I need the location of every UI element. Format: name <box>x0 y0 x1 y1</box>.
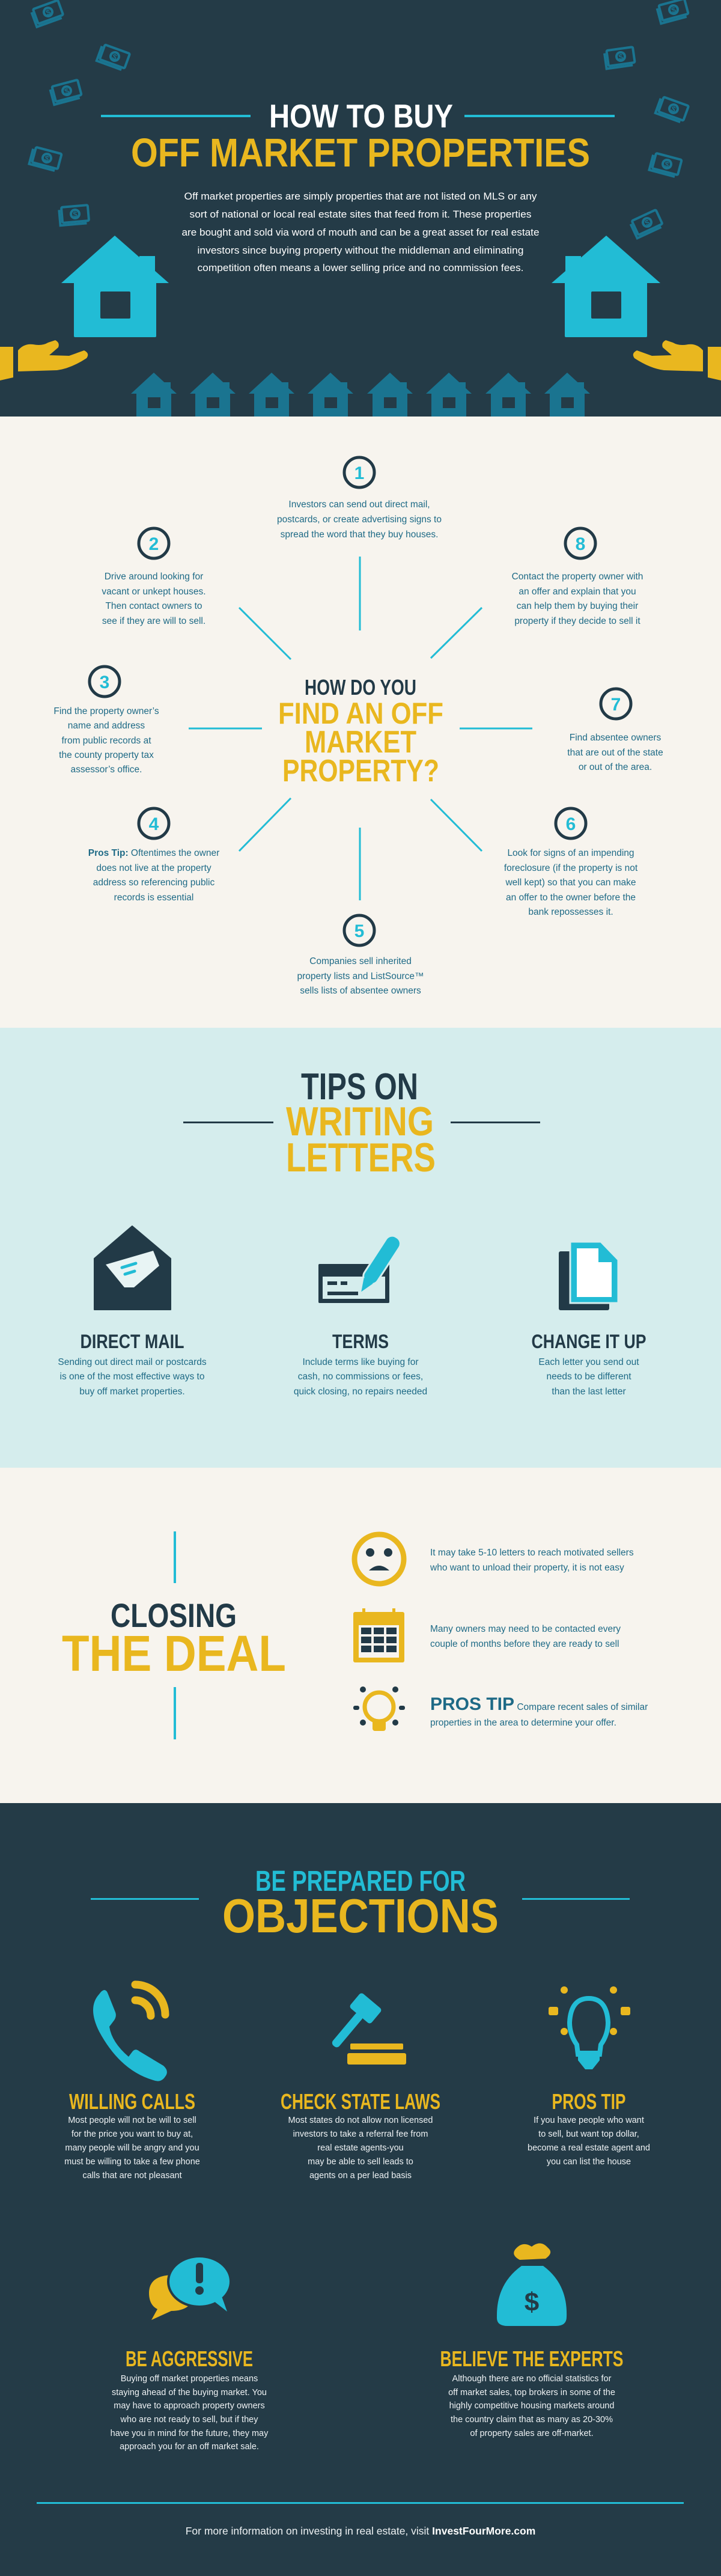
step texts: name and address <box>68 721 145 731</box>
icon: right house <box>552 236 660 337</box>
step texts: Find absentee owners <box>570 733 662 743</box>
step texts: Pros Tip: Oftentimes the owner <box>88 848 219 858</box>
step texts: Then contact owners to <box>105 601 202 611</box>
heading: tips on writing letters: LETTERS <box>286 1135 436 1180</box>
step texts: see if they are will to sell. <box>102 616 205 626</box>
panel: how do you find an off market property: 4 <box>149 814 159 834</box>
step texts: well kept) so that you can make <box>505 877 636 888</box>
objections row 2: Buying off market properties means <box>121 2374 258 2384</box>
panel: how do you find an off market property: 7 <box>611 695 621 715</box>
step texts: bank repossesses it. <box>528 907 613 917</box>
tips: three columns: Sending out direct mail or postcards <box>58 1357 207 1367</box>
closing texts <box>430 1548 648 1728</box>
section backgrounds <box>0 0 721 417</box>
objections row 1: must be willing to take a few phone <box>64 2157 200 2167</box>
row of small houses <box>131 373 590 417</box>
objections row 1: may be able to sell leads to <box>308 2157 413 2167</box>
icon: check and pen <box>318 1233 403 1303</box>
heading: be prepared for objections: BE PREPARED FOR <box>255 1866 466 1897</box>
icons: money bills: $ <box>64 86 70 96</box>
step texts: spread the word that they buy houses. <box>281 530 438 540</box>
tips: three columns: than the last letter <box>552 1387 626 1397</box>
icon: left hand <box>0 340 88 380</box>
objections row 1: many people will be angry and you <box>65 2143 199 2153</box>
heading: be prepared for objections: OBJECTIONS <box>222 1889 499 1943</box>
objections row 1: you can list the house <box>547 2157 631 2167</box>
icon: phone <box>93 1985 167 2081</box>
objections row 1: PROS TIP <box>552 2089 626 2114</box>
step texts: address so referencing public <box>93 877 214 888</box>
objections row 2: of property sales are off-market. <box>470 2429 594 2438</box>
tips: three columns: DIRECT MAIL <box>81 1331 184 1352</box>
step texts: from public records at <box>61 736 151 746</box>
step texts: Find the property owner’s <box>53 706 159 716</box>
objections row 2: who are not ready to sell, but if they <box>120 2415 258 2425</box>
icon: money bag: $ <box>525 2288 539 2317</box>
step texts: property if they decide to sell it <box>514 616 640 626</box>
number circles <box>90 457 631 945</box>
icons: money bills: $ <box>643 218 651 228</box>
heading: tips on writing letters: TIPS ON <box>301 1066 418 1108</box>
tips: three columns: buy off market properties. <box>79 1387 185 1397</box>
icons: money bills <box>29 0 689 238</box>
icons: money bills: $ <box>663 159 671 169</box>
heading: closing the deal <box>62 1531 286 1739</box>
objections row 1: If you have people who want <box>534 2116 644 2125</box>
panel: how do you find an off market property: 6 <box>566 814 576 834</box>
step texts: an offer to the owner before the <box>506 893 636 903</box>
objections row 1: calls that are not pleasant <box>82 2171 182 2181</box>
step texts: can help them by buying their <box>517 601 638 611</box>
icon: light bulb <box>353 1686 405 1731</box>
icon: calendar <box>353 1608 404 1662</box>
objections row 1: CHECK STATE LAWS <box>281 2089 440 2114</box>
step texts: records is essential <box>114 893 193 903</box>
objections row 2: highly competitive housing markets around <box>449 2401 614 2411</box>
center heading <box>278 675 443 789</box>
objections row 2: staying ahead of the buying market. You <box>112 2388 267 2397</box>
objections row 1 <box>64 2089 650 2181</box>
tips: three columns: quick closing, no repairs needed <box>294 1387 427 1397</box>
closing texts: properties in the area to determine your offer. <box>430 1718 616 1728</box>
tips: three columns: CHANGE IT UP <box>531 1331 646 1352</box>
step texts: Companies sell inherited <box>309 956 412 966</box>
step texts: Investors can send out direct mail, <box>288 499 430 510</box>
heading: closing the deal: CLOSING <box>111 1596 237 1634</box>
objections row 1: for the price you want to buy at, <box>71 2129 193 2139</box>
tips: three columns: cash, no commissions or fees, <box>298 1372 423 1382</box>
tips: three columns: is one of the most effective ways to <box>60 1372 204 1382</box>
intro paragraph <box>181 191 540 273</box>
heading: closing the deal: THE DEAL <box>62 1625 286 1682</box>
objections row 1: agents on a per lead basis <box>309 2171 412 2181</box>
spokes <box>189 557 532 900</box>
heading: be prepared for objections <box>91 1866 630 1943</box>
step texts: Look for signs of an impending <box>507 848 634 858</box>
panel: how do you find an off market property: 8 <box>576 534 585 554</box>
tips: three columns: Each letter you send out <box>538 1357 639 1367</box>
objections row 2: BELIEVE THE EXPERTS <box>440 2346 624 2371</box>
step texts: vacant or unkept houses. <box>102 587 206 597</box>
panel: how do you find an off market property <box>53 457 663 996</box>
objections row 1: Most people will not be will to sell <box>68 2116 196 2125</box>
tips: three columns <box>58 1331 646 1397</box>
icons: money bills: $ <box>44 7 52 17</box>
objections row 2: approach you for an off market sale. <box>120 2442 259 2452</box>
panel: how do you find an off market property: 2 <box>149 534 159 554</box>
icons: money bills: $ <box>671 5 677 15</box>
closing texts: PROS TIP Compare recent sales of similar <box>430 1694 648 1714</box>
closing texts: Many owners may need to be contacted every <box>430 1624 621 1634</box>
step texts: postcards, or create advertising signs to <box>277 514 442 525</box>
objections row 1: become a real estate agent and <box>528 2143 650 2153</box>
icons: money bills: $ <box>618 52 624 61</box>
step texts: Contact the property owner with <box>512 572 643 582</box>
icon: sad face <box>354 1534 404 1584</box>
step texts: Drive around looking for <box>105 572 203 582</box>
intro paragraph: sort of national or local real estate sites that feed from it. These properties <box>190 209 531 220</box>
step texts: does not live at the property <box>96 863 211 873</box>
objections row 2 <box>111 2346 624 2452</box>
icon: gavel <box>323 1992 406 2065</box>
icons: money bills: $ <box>73 210 78 219</box>
objections row 2: have you in mind for the future, they may <box>111 2429 269 2438</box>
intro paragraph: are bought and sold via word of mouth and can be a great asset for real estate <box>181 227 540 238</box>
panel: how do you find an off market property: 5 <box>354 921 364 941</box>
intro paragraph: competition often means a lower selling price and no commission fees. <box>197 262 524 273</box>
objections row 1: WILLING CALLS <box>69 2089 195 2114</box>
title: HOW TO BUY <box>269 97 453 135</box>
objections row 2: off market sales, top brokers in some of the <box>448 2388 615 2397</box>
intro paragraph: investors since buying property without the middleman and eliminating <box>197 245 524 256</box>
objections row 1: Most states do not allow non licensed <box>288 2116 433 2125</box>
heading: tips on writing letters <box>183 1066 540 1180</box>
step texts <box>53 499 663 996</box>
objections row 2: BE AGGRESSIVE <box>126 2346 253 2371</box>
step texts: sells lists of absentee owners <box>300 986 421 996</box>
objections row 1: real estate agents-you <box>317 2143 404 2153</box>
step texts: foreclosure (if the property is not <box>504 863 638 873</box>
center heading: HOW DO YOU <box>305 675 416 700</box>
center heading: FIND AN OFF <box>278 697 443 730</box>
closing texts: It may take 5-10 letters to reach motivated sellers <box>430 1548 634 1558</box>
step texts: an offer and explain that you <box>519 587 636 597</box>
icon: envelope <box>94 1226 171 1310</box>
icon: left house <box>61 236 169 337</box>
title <box>101 97 615 175</box>
tips: three columns: Include terms like buying for <box>303 1357 418 1367</box>
step texts: assessor’s office. <box>71 765 142 775</box>
panel: how do you find an off market property: 3 <box>100 673 109 692</box>
objections row 2: may have to approach property owners <box>114 2401 265 2411</box>
objections row 1: investors to take a referral fee from <box>293 2129 428 2139</box>
objections row 2: the country claim that as many as 20-30% <box>451 2415 613 2425</box>
footer <box>37 2502 684 2537</box>
icon: documents <box>559 1242 618 1310</box>
center heading: PROPERTY? <box>282 754 439 789</box>
icon: speech bubbles <box>149 2256 231 2320</box>
icon: money bag <box>497 2243 567 2326</box>
heading: tips on writing letters: WRITING <box>286 1099 434 1144</box>
step texts: property lists and ListSource™ <box>297 971 424 981</box>
tips: three columns: TERMS <box>332 1331 389 1352</box>
panel: how do you find an off market property: 1 <box>354 463 364 483</box>
objections row 2: Although there are no official statistics for <box>452 2374 612 2384</box>
step texts: that are out of the state <box>567 748 663 758</box>
icons: money bills: $ <box>111 52 119 62</box>
center heading: MARKET <box>305 725 416 760</box>
objections row 1: to sell, but want top dollar, <box>538 2129 639 2139</box>
closing texts: who want to unload their property, it is not easy <box>430 1563 624 1573</box>
intro paragraph: Off market properties are simply properties that are not listed on MLS or any <box>184 191 537 202</box>
icon: light bulb cyan <box>549 1986 630 2069</box>
icon: right hand <box>633 340 721 380</box>
footer: For more information on investing in real estate, visit InvestFourMore.com <box>186 2525 535 2537</box>
tips: three columns: needs to be different <box>546 1372 631 1382</box>
closing texts: couple of months before they are ready to sell <box>430 1639 619 1649</box>
icons: money bills: $ <box>670 104 678 114</box>
step texts: or out of the area. <box>579 762 652 772</box>
step texts: the county property tax <box>59 750 154 760</box>
title: OFF MARKET PROPERTIES <box>131 130 590 175</box>
icons: money bills: $ <box>43 153 50 163</box>
